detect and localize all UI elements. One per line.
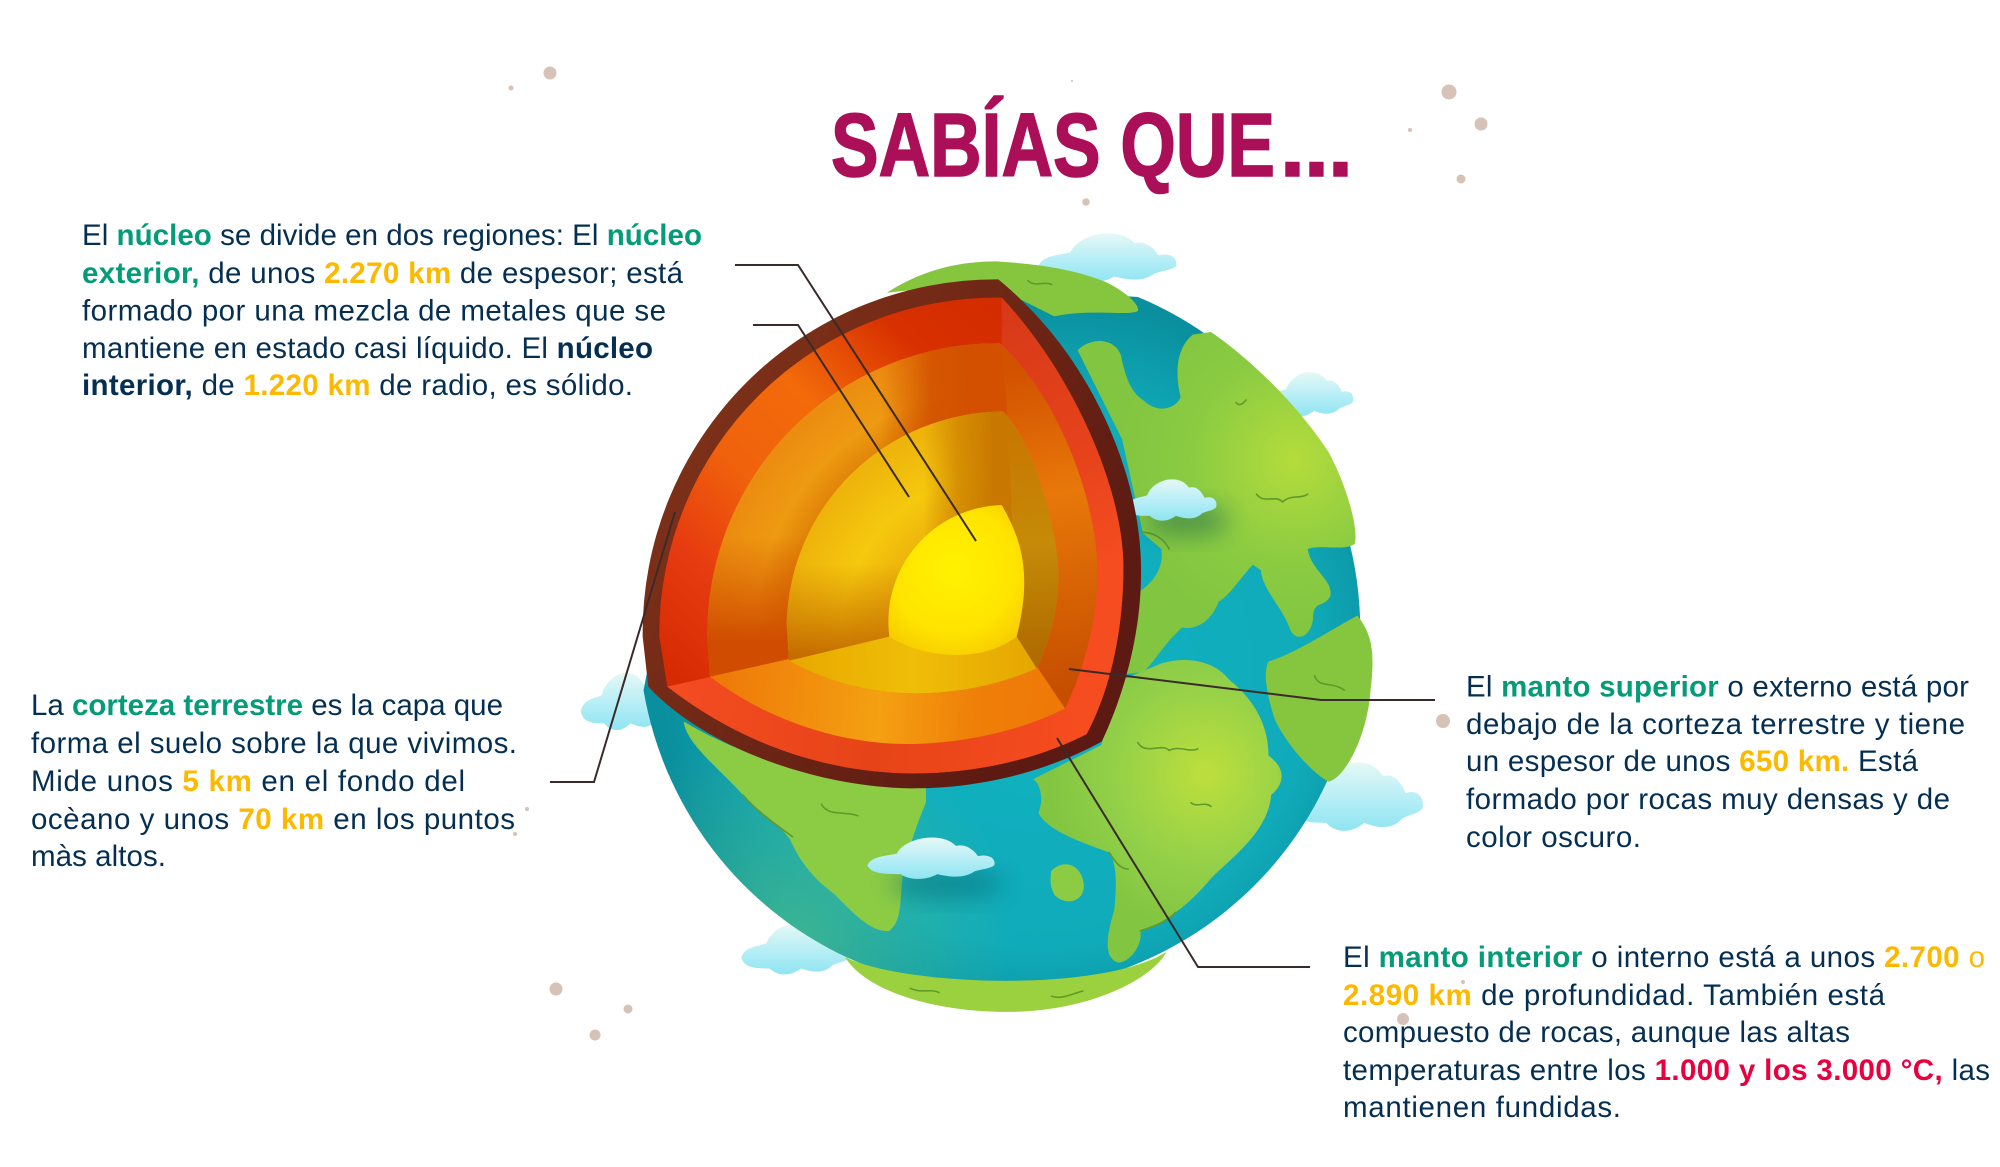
leader line: lower mantle [1057, 738, 1310, 967]
crust shell [643, 279, 1141, 788]
title: SABÍAS QUE [831, 95, 1275, 196]
title: ... [1280, 96, 1353, 196]
text: crust: Mide unos 5 km en el fondo del [31, 765, 465, 798]
earth illustration [581, 233, 1423, 1012]
text: core [82, 219, 702, 402]
text: lower mantle: temperaturas entre los 1.000 y los 3.000 °C, las [1343, 1054, 1990, 1087]
decorative dots [508, 66, 1488, 1040]
land: top cap [887, 261, 1138, 316]
leader line: crust [550, 512, 675, 782]
text: upper mantle: El manto superior o externo está por [1466, 670, 1969, 704]
text: upper mantle: debajo de la corteza terrestre y tiene [1466, 708, 1965, 741]
text: lower mantle: mantienen fundidas. [1343, 1091, 1621, 1124]
land: southern continent [1033, 660, 1282, 962]
clouds behind globe [581, 233, 1423, 974]
land: eastern island [1266, 615, 1373, 782]
text: lower mantle: El manto interior o interno está a unos 2.700 o [1343, 941, 1985, 974]
text: upper mantle: formado por rocas muy densas y de [1466, 783, 1950, 816]
land: southwestern continent [684, 722, 926, 931]
text: crust [31, 689, 517, 873]
leader line: inner core [753, 325, 909, 497]
text: crust: forma el suelo sobre la que vivimos. [31, 727, 517, 760]
text: crust: La corteza terrestre es la capa que [31, 689, 503, 722]
leader line: outer core [735, 265, 976, 541]
land: bottom cap [845, 952, 1167, 1012]
text: crust: ocèano y unos 70 km en los puntos [31, 803, 515, 836]
land masses [684, 261, 1373, 1012]
outer core layer [787, 412, 1058, 693]
text: upper mantle: un espesor de unos 650 km. Está [1466, 745, 1919, 778]
land texture marks [743, 281, 1344, 997]
leader line: upper mantle [1069, 669, 1435, 700]
land: small island [1051, 864, 1084, 901]
text: upper mantle [1466, 670, 1969, 854]
text: core: exterior, de unos 2.270 km de espesor; está [82, 257, 684, 290]
text: lower mantle [1343, 941, 1990, 1124]
text: core: El núcleo se divide en dos regiones: El núcleo [82, 219, 702, 252]
text: core: interior, de 1.220 km de radio, es sólido. [82, 369, 633, 402]
cloud shadows [889, 505, 1229, 898]
text: lower mantle: 2.890 km de profundidad. También está [1343, 979, 1886, 1012]
globe ocean [644, 288, 1360, 991]
inner core [888, 505, 1024, 655]
text: crust: màs altos. [31, 840, 166, 873]
clouds in front of globe [867, 479, 1216, 879]
text: lower mantle: compuesto de rocas, aunque las altas [1343, 1016, 1850, 1049]
upper mantle layer [659, 298, 1123, 773]
land: large northern continent [1078, 332, 1355, 675]
text: core: formado por una mezcla de metales que se [82, 294, 666, 328]
lower mantle layer [707, 343, 1097, 744]
text: upper mantle: color oscuro. [1466, 821, 1641, 854]
text: core: mantiene en estado casi líquido. El núcleo [82, 332, 653, 365]
cut-away wedge [643, 279, 1141, 788]
